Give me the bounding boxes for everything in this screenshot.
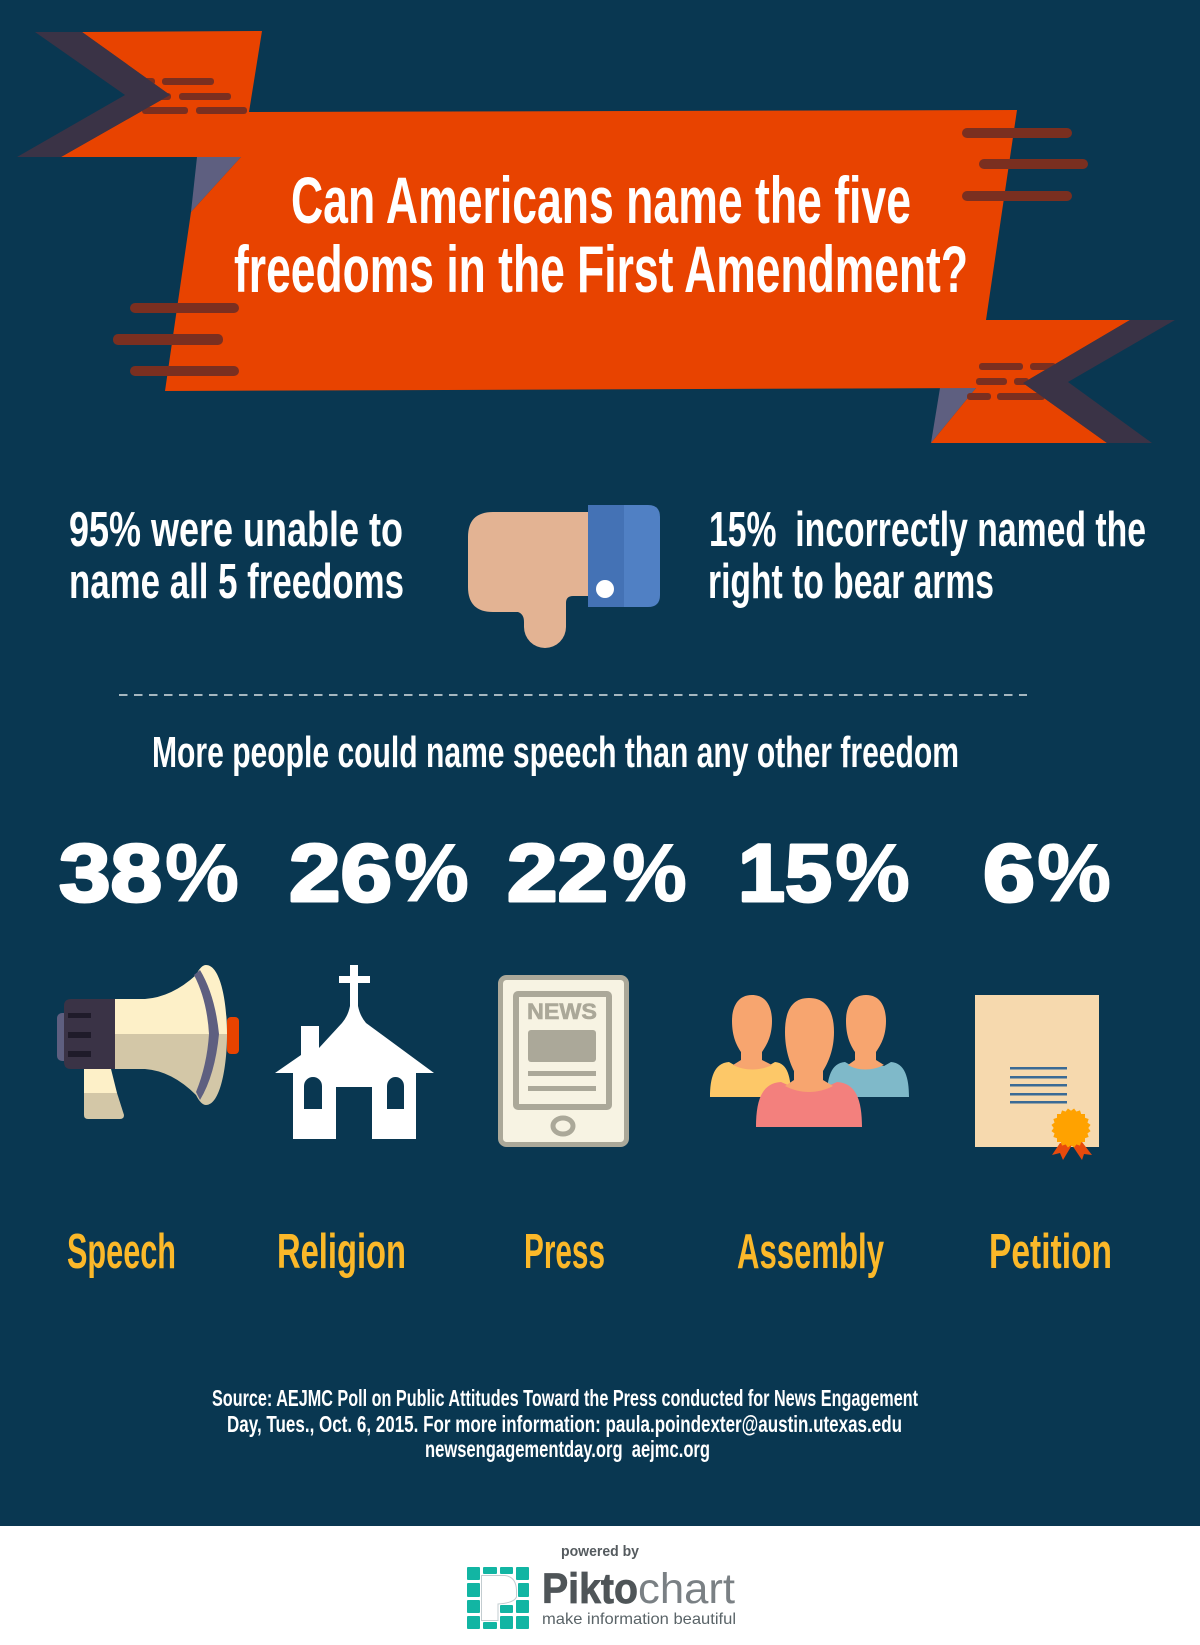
piktochart wordmark: chart — [638, 1565, 735, 1613]
icon: news tablet: NEWS — [527, 999, 597, 1024]
title: Can Americans name the five — [291, 163, 911, 237]
freedom labels: Speech — [67, 1225, 176, 1279]
freedom labels: Religion — [277, 1225, 406, 1279]
icon: petition certificate — [975, 995, 1099, 1160]
38% — [59, 828, 239, 919]
person: left — [710, 995, 791, 1097]
title — [234, 163, 968, 306]
icon: assembly people — [710, 995, 909, 1127]
ribbon chevron: left — [17, 32, 170, 157]
icon: thumbs down — [468, 505, 660, 648]
6%: % — [1037, 828, 1111, 919]
freedom labels: Petition — [989, 1225, 1112, 1279]
ribbon fold: right — [931, 388, 976, 443]
ribbon fold: left — [191, 157, 241, 212]
22% — [507, 828, 687, 919]
38%: % — [165, 828, 239, 919]
stat: 15% right to bear arms: right to bear arms — [708, 555, 994, 609]
title ribbon — [17, 31, 1175, 443]
stat: 95% unable: 95% were unable to — [69, 503, 403, 557]
powered by: powered by — [561, 1543, 640, 1560]
26%: 26 — [289, 828, 392, 919]
26%: % — [394, 828, 469, 919]
person: centre — [756, 998, 862, 1127]
source note: Source: AEJMC Poll on Public Attitudes Toward the Press conducted for News Engagement — [212, 1385, 918, 1411]
freedom labels: Press — [524, 1225, 605, 1279]
stat: 95% unable: name all 5 freedoms — [69, 555, 404, 609]
icon: church — [275, 965, 434, 1139]
icon: megaphone — [57, 965, 239, 1119]
piktochart wordmark: Pikto — [542, 1565, 638, 1613]
percentages — [59, 828, 1111, 919]
26% — [289, 828, 469, 919]
freedom labels: Assembly — [737, 1225, 884, 1279]
6% — [983, 828, 1111, 919]
15%: % — [835, 828, 910, 919]
footer — [0, 1526, 1200, 1645]
icon: news tablet — [500, 978, 626, 1144]
38%: 38 — [59, 828, 162, 919]
6%: 6 — [983, 828, 1035, 919]
stat: 95% unable — [69, 503, 404, 609]
tagline: make information beautiful — [542, 1611, 736, 1628]
22%: % — [612, 828, 687, 919]
ribbon accent dashes — [113, 78, 1088, 400]
ribbon body — [61, 31, 1130, 443]
source note — [212, 1385, 918, 1462]
piktochart logo mark — [467, 1567, 529, 1629]
15% — [738, 828, 910, 919]
15%: 15 — [738, 828, 832, 919]
source note: Day, Tues., Oct. 6, 2015. For more information: paula.poindexter@austin.utexas.edu — [227, 1411, 902, 1437]
person: right — [827, 995, 909, 1097]
22%: 22 — [507, 828, 608, 919]
source note: newsengagementday.org aejmc.org — [425, 1436, 710, 1462]
ribbon chevron: right — [1023, 320, 1175, 443]
stat: 15% right to bear arms — [708, 503, 1146, 609]
freedom labels — [67, 1225, 1112, 1279]
